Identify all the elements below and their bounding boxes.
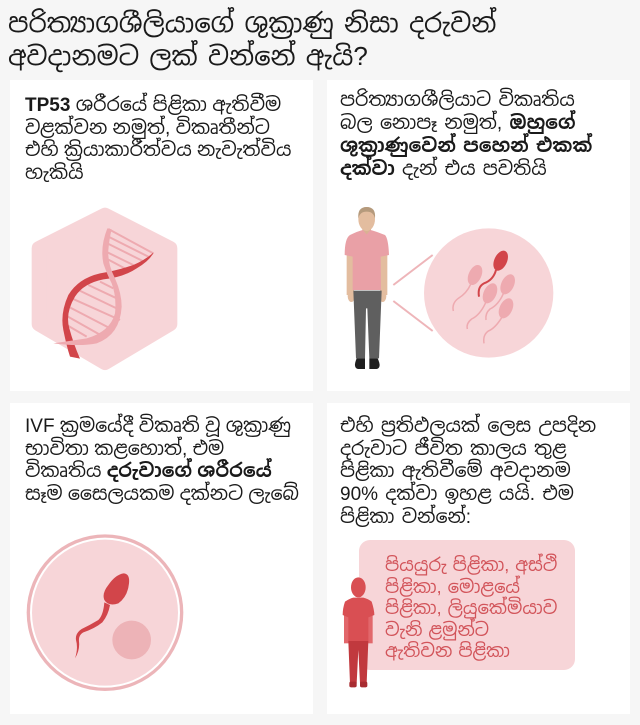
text: TP53: TP53 ශරීරයේ පිළිකා ඇතිවීම [25,95,281,116]
text: IVF: විකෘතිය දරුවාගේ ශරීරයේ [25,461,272,482]
callout text: පියයුරු පිළිකා, අස්ථි [385,555,557,575]
text: TP53: වළක්වන නමුත්, විකෘතීන්ට [25,118,270,138]
callout text: පිළිකා, මොළයේ [385,576,520,596]
text: TP53: හැකියි [25,162,84,184]
text: donor: දක්වා දැන් එය පවතියි [340,159,547,180]
text: result [340,414,596,528]
panel: TP53 [10,80,313,391]
text: result: පිළිකා වන්නේ: [340,507,471,528]
text: IVF: IVF ක්‍රමයේදී විකෘති වූ ශුක්‍රාණු [25,416,291,437]
callout: cancers [359,540,575,670]
text: result: පිළිකා ඇතිවීමේ අවදානම [340,461,571,482]
icon: child [342,577,374,688]
title: අවදානමට ලක් වන්නේ ඇයි? [8,41,368,71]
icon: DNA hexagon [32,208,178,370]
text: donor: ශුක්‍රාණුවෙන් පහෙන් එකක් [340,136,592,157]
sperm cells [465,263,518,321]
callout text: ඇතිවන පිළිකා [385,641,510,661]
illustration: man and sperm circle [344,207,554,369]
callout text [385,554,557,661]
text: TP53: එහි ක්‍රියාකාරීත්වය නැවැත්විය [25,140,291,161]
text: IVF: භාවිතා කළහොත්, එම [25,439,224,460]
icon: sperm and cell circle [26,534,184,691]
panel: donor [327,80,630,391]
text: donor: බල නොපෑ නමුත්, ඔහුගේ [340,113,576,134]
text: donor [340,88,592,180]
text: IVF [25,414,299,505]
text: donor: පරිත්‍යාගශීලියාට විකෘතිය [340,90,575,111]
callout text: වැනි ළමුන්ට [385,620,489,640]
text: result: 90% දක්වා ඉහළ යයි. එම [340,484,574,505]
man [345,207,389,369]
title: පරිත්‍යාගශීලියාගේ ශුක්‍රාණු නිසා දරුවන් [8,8,496,38]
panel: result [327,403,630,714]
text: result: දරුවාට ජීවිත කාලය තුළ [340,439,567,460]
text: result: එහි ප්‍රතිඵලයක් ලෙස උපදින [340,416,596,437]
panel: IVF [10,403,313,714]
text: TP53 [25,92,291,184]
text: IVF: සෑම සෛලයකම දක්නට ලැබේ [25,484,299,505]
title [8,7,496,72]
callout text: පිළිකා, ලියුකේමියාව [385,598,557,618]
